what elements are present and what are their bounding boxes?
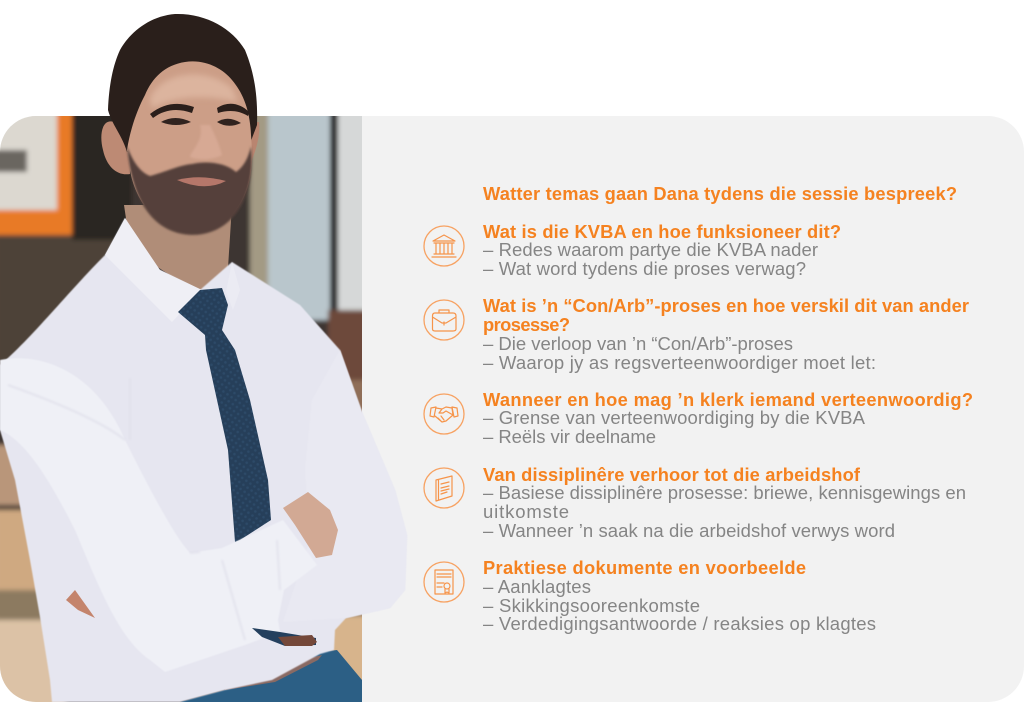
text block: Con/Arb	[483, 295, 969, 373]
sleeve fold lines	[8, 378, 280, 640]
tie tail	[252, 628, 316, 646]
shirt body	[0, 218, 407, 702]
ear right	[248, 122, 259, 168]
trousers	[180, 650, 362, 702]
text block: klerk: – Reëls vir deelname	[483, 426, 656, 447]
text block: dissipline: – Basiese dissiplinêre prosesse: briewe, kennisgewings en	[483, 482, 966, 503]
forehead highlight	[150, 75, 238, 108]
tie	[178, 288, 271, 542]
right sleeve	[283, 350, 407, 622]
panel: grey content card	[362, 116, 1024, 702]
icon: law book	[424, 468, 464, 508]
text block: KVBA: – Redes waarom partye die KVBA nader	[483, 239, 818, 260]
text block: dissipline	[483, 464, 966, 541]
icon: handshake	[424, 394, 464, 434]
face	[127, 61, 252, 233]
photo background	[0, 110, 370, 702]
text block: KVBA: Wat is die KVBA en hoe funksioneer dit?	[483, 221, 841, 242]
text block: dissipline: Van dissiplinêre verhoor tot die arbeidshof	[483, 464, 861, 485]
hand right	[283, 492, 338, 558]
text block: klerk: – Grense van verteenwoordiging by die KVBA	[483, 407, 866, 428]
beard	[127, 146, 252, 235]
hand left	[66, 590, 95, 618]
eyebrows	[150, 104, 194, 118]
text block: Con/Arb: – Die verloop van ’n “Con/Arb”-proses	[483, 333, 793, 354]
hair back	[108, 14, 257, 170]
text block: dokumente: Praktiese dokumente en voorbeelde	[483, 557, 806, 578]
text block: dokumente: – Aanklagtes	[483, 576, 591, 597]
nose	[190, 125, 222, 159]
text block: KVBA: – Wat word tydens die proses verwag?	[483, 258, 806, 279]
text block: Con/Arb: prosesse?	[483, 314, 570, 335]
text block: Con/Arb: – Waarop jy as regsverteenwoordiger moet let:	[483, 352, 876, 373]
text block: dokumente: – Skikkingsooreenkomste	[483, 595, 700, 616]
text block: dokumente: – Verdedigingsantwoorde / reaksies op klagtes	[483, 613, 876, 634]
eyes	[161, 118, 191, 125]
text block: klerk	[483, 389, 973, 447]
shirt collar	[105, 218, 202, 322]
icon: briefcase	[424, 300, 464, 340]
photo: man in white shirt and tie	[0, 14, 407, 702]
text block: KVBA	[483, 221, 841, 279]
belt	[225, 655, 322, 690]
neck	[124, 205, 232, 295]
front arm sleeve	[0, 358, 317, 672]
text block: klerk: Wanneer en hoe mag ’n klerk iemand verteenwoordig?	[483, 389, 973, 410]
ear left	[101, 121, 132, 174]
text block: dokumente	[483, 557, 876, 634]
text block: Con/Arb: Wat is ’n “Con/Arb”-proses en hoe verskil dit van ander	[483, 295, 969, 316]
icon: certificate document	[424, 562, 464, 602]
icon: bank building	[424, 226, 464, 266]
text block: dissipline: – Wanneer ’n saak na die arbeidshof verwys word	[483, 520, 895, 541]
heading: Watter temas gaan Dana tydens die sessie bespreek?	[483, 183, 957, 204]
text block: dissipline: uitkomste	[483, 501, 569, 522]
